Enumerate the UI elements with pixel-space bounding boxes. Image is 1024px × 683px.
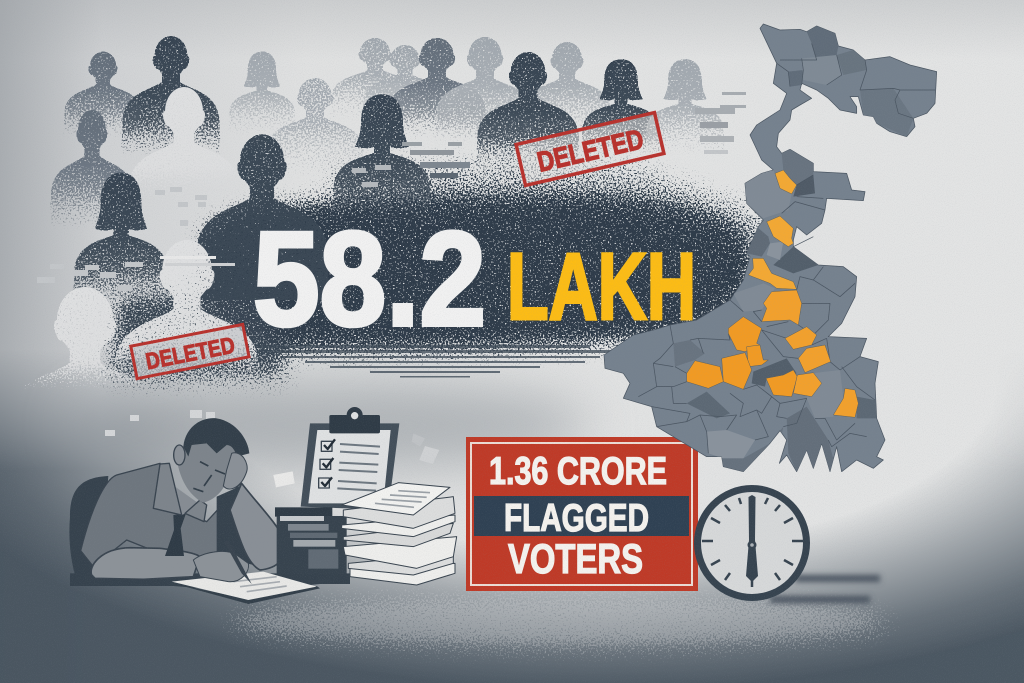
writing hand — [193, 551, 249, 582]
map: west bengal districts — [604, 24, 937, 472]
paper — [173, 583, 320, 604]
silhouettes crowd — [0, 36, 725, 485]
desk shadow — [70, 573, 350, 592]
face — [177, 440, 237, 503]
map: highlighted districts — [687, 170, 858, 417]
sign: 1.36 crore flagged voters: FLAGGED — [504, 497, 649, 540]
pen — [224, 540, 252, 584]
raised hand — [223, 453, 247, 489]
tie — [165, 513, 186, 556]
map: shaded districts — [673, 26, 913, 472]
headline: 58.2 LAKH: LAKH — [507, 234, 696, 340]
sign: 1.36 crore flagged voters: VOTERS — [508, 535, 643, 582]
chair — [69, 476, 108, 575]
eyes and mouth — [193, 462, 225, 492]
stamp: deleted bottom: DELETED — [144, 332, 237, 374]
clipboard — [301, 407, 399, 510]
loose papers — [273, 433, 439, 487]
paper stack — [342, 483, 457, 585]
hair — [183, 418, 249, 457]
map: district borders — [638, 43, 935, 453]
stamp: deleted top — [516, 113, 664, 185]
raised arm — [230, 483, 286, 570]
torso — [81, 463, 250, 567]
collar — [153, 463, 207, 522]
forearm — [91, 548, 200, 579]
clock — [698, 488, 806, 598]
dark lapel gap — [217, 485, 260, 567]
man at desk — [69, 407, 457, 604]
ear — [174, 445, 185, 465]
headline: 58.2 LAKH: 58.2 — [253, 205, 486, 354]
band streaks — [250, 345, 612, 378]
headline: 58.2 LAKH — [253, 205, 696, 354]
dark band — [110, 160, 775, 378]
stamp: deleted top: DELETED — [534, 123, 646, 178]
small books — [275, 507, 347, 574]
clock shadow — [770, 575, 880, 603]
sign: 1.36 crore flagged voters — [466, 437, 698, 591]
map base — [604, 24, 937, 472]
sign: 1.36 crore flagged voters: 1.36 CRORE — [489, 450, 667, 493]
dissolving fragments — [37, 92, 746, 436]
neck — [170, 487, 203, 515]
